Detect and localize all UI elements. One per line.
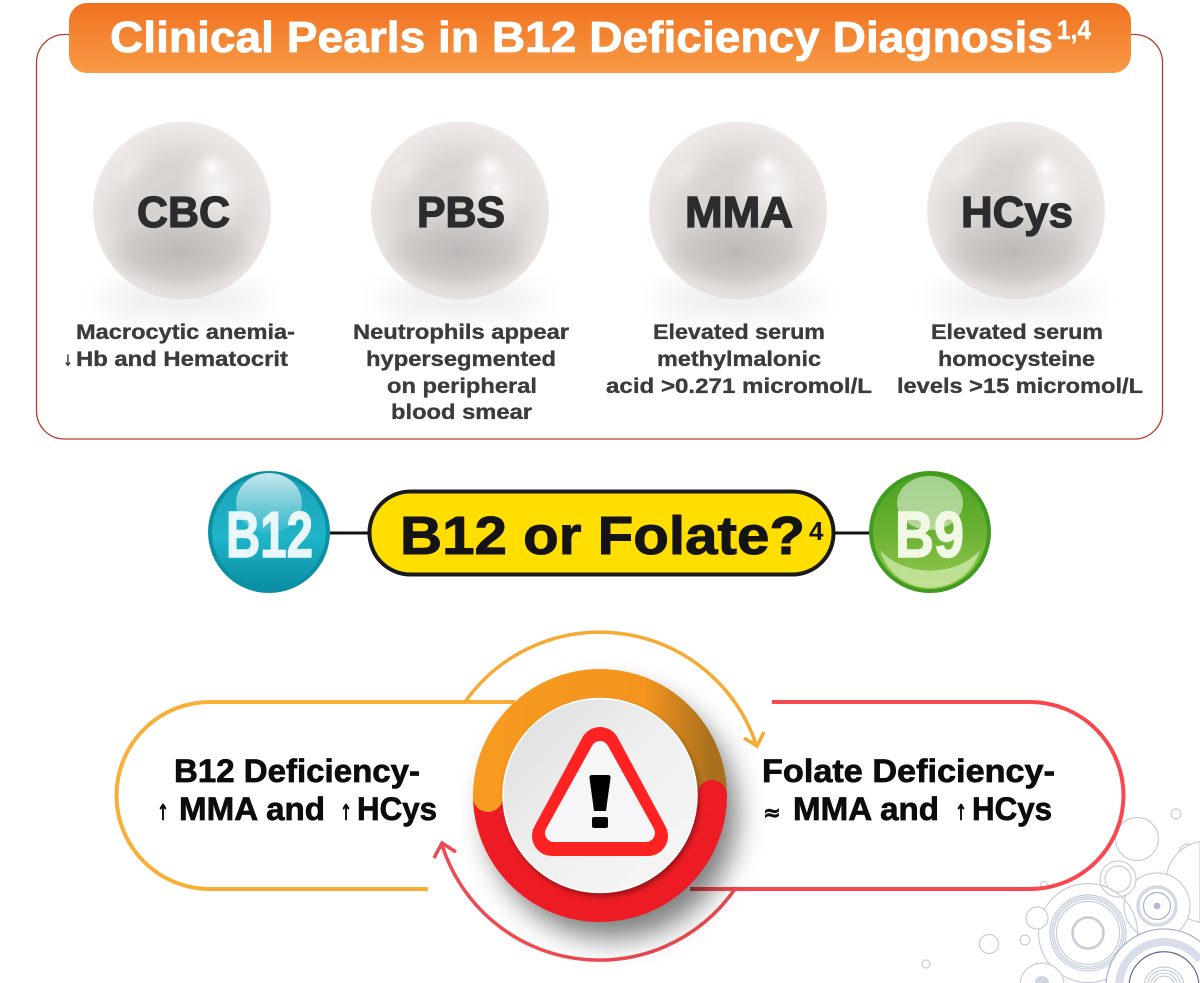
- pearl: HCys: [919, 122, 1105, 316]
- text: B12 deficiency: MMA and: [179, 791, 325, 827]
- pearl: CBC: [85, 122, 271, 316]
- caption: CBC: Hb and Hematocrit: [76, 348, 288, 371]
- title banner: [69, 3, 1131, 73]
- icon: B12 capsule: [208, 471, 330, 593]
- caption: HCys: levels >15 micromol/L: [897, 375, 1143, 398]
- caption: HCys: Elevated serum: [931, 321, 1103, 344]
- pearl: PBS: [363, 122, 549, 316]
- text: folate deficiency: Folate Deficiency-: [762, 753, 1055, 789]
- inner disc: [503, 698, 697, 892]
- B12 or Folate connector lines: [325, 532, 875, 534]
- arrow: red clockwise: [434, 843, 735, 960]
- ring: orange upper: [488, 684, 712, 797]
- caption: PBS: on peripheral: [387, 375, 537, 398]
- icon: warning triangle: [552, 747, 648, 836]
- warning dial: [487, 684, 737, 939]
- panel: clinical pearls: [36, 3, 1162, 439]
- pearl: MMA: MMA: [685, 188, 793, 237]
- text: folate deficiency: ≈: [763, 801, 781, 826]
- text: folate deficiency: ↑: [955, 801, 967, 826]
- title: Clinical Pearls in B12 Deficiency Diagnosis: [110, 13, 1053, 62]
- text: B12 deficiency: ↑: [157, 801, 169, 826]
- caption: CBC: [63, 321, 295, 371]
- caption: PBS: hypersegmented: [366, 348, 556, 371]
- pearl: PBS: PBS: [417, 188, 505, 237]
- pearl: MMA: [641, 122, 827, 316]
- caption: CBC: ↓: [63, 351, 73, 370]
- icon: B9 capsule: B9: [895, 498, 964, 571]
- text: B12 deficiency: HCys: [357, 791, 437, 827]
- caption: MMA: acid >0.271 micromol/L: [606, 375, 872, 398]
- pearl: HCys: HCys: [961, 188, 1073, 237]
- callout: B12 deficiency outline: [116, 702, 515, 889]
- text: B12 deficiency: ↑: [340, 801, 352, 826]
- arrow: orange clockwise: [465, 632, 764, 746]
- text: B12 deficiency: [157, 753, 437, 827]
- text: folate deficiency: [762, 753, 1055, 827]
- caption: MMA: methylmalonic: [657, 348, 821, 371]
- caption: MMA: [606, 321, 872, 398]
- text: folate deficiency: MMA and: [793, 791, 939, 827]
- decorative bubbles: [922, 809, 1200, 983]
- pearl: CBC: CBC: [137, 188, 230, 237]
- caption: PBS: blood smear: [391, 401, 532, 424]
- icon: B9 capsule: [869, 471, 991, 593]
- caption: PBS: Neutrophils appear: [353, 321, 569, 344]
- caption: CBC: Macrocytic anemia-: [76, 321, 295, 344]
- caption: HCys: homocysteine: [938, 348, 1095, 371]
- heading pill: B12 or Folate: 4: [809, 516, 824, 546]
- title superscript: 1,4: [1057, 15, 1091, 45]
- caption: HCys: [897, 321, 1143, 398]
- heading pill: B12 or Folate: [370, 492, 834, 574]
- icon: B12 capsule: B12: [226, 498, 313, 571]
- caption: MMA: Elevated serum: [653, 321, 825, 344]
- callout: folate deficiency outline: [690, 702, 1124, 889]
- text: folate deficiency: HCys: [972, 791, 1052, 827]
- text: B12 deficiency: B12 Deficiency-: [174, 753, 420, 789]
- ring: red end cap: [697, 780, 727, 810]
- caption: PBS: [353, 321, 569, 424]
- heading pill: B12 or Folate: B12 or Folate?: [400, 506, 805, 566]
- ring: red lower: [488, 795, 712, 907]
- panel border: [36, 34, 1162, 439]
